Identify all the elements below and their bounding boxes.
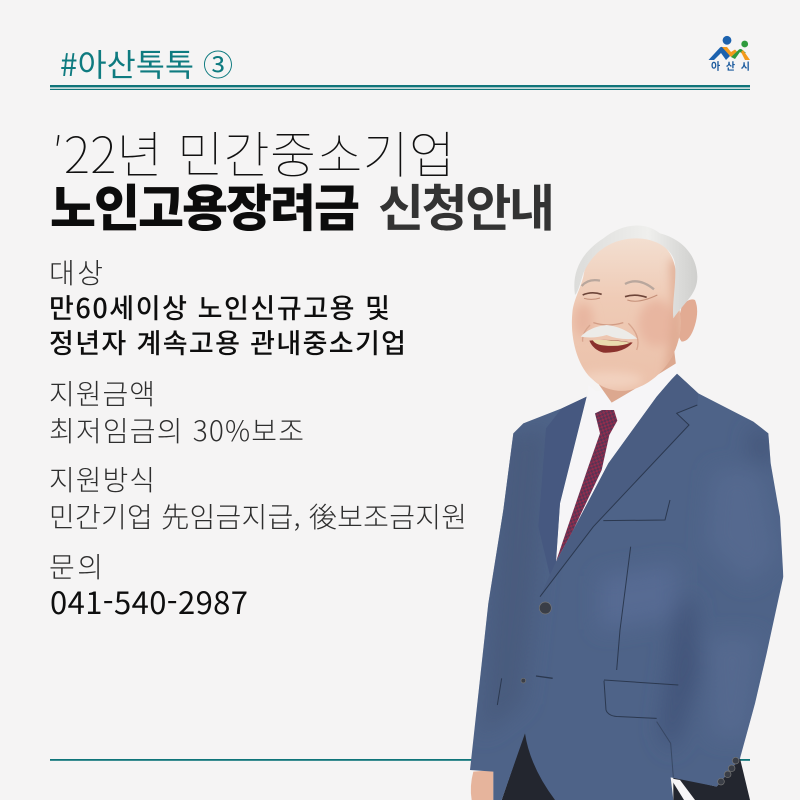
section: target — [49, 252, 406, 361]
section: support method: 민간기업 先임금지급, 後보조금지원 — [49, 496, 467, 536]
section: target: 정년자 계속고용 관내중소기업 — [49, 322, 406, 361]
shirt — [555, 372, 677, 562]
head — [572, 225, 697, 410]
photo: smiling senior man in suit — [460, 225, 800, 800]
section: support amount: 지원금액 — [49, 373, 155, 413]
section: support method — [49, 459, 467, 536]
icon: Asan city logo — [708, 36, 750, 73]
section: contact — [49, 546, 248, 623]
section: support amount: 최저임금의 30%보조 — [49, 410, 304, 450]
hand — [471, 770, 493, 800]
left lapel — [542, 396, 586, 574]
shirt cuff — [671, 778, 695, 800]
section: support amount — [49, 373, 304, 450]
jacket shading — [480, 427, 777, 753]
mouth — [589, 340, 633, 353]
title line 2: 신청안내 — [378, 169, 555, 241]
title line 2: 노인고용장려금 — [50, 169, 360, 241]
title line 1: ′22년 민간중소기업 — [52, 116, 455, 188]
face shading — [573, 260, 683, 388]
face — [572, 237, 681, 391]
right lapel — [556, 374, 698, 562]
hair — [574, 225, 697, 318]
jacket — [460, 370, 800, 800]
icon: Asan city logo: 아 산 시 — [711, 58, 750, 73]
tie — [556, 409, 617, 562]
seams — [497, 405, 697, 777]
eyes and brows — [582, 280, 657, 350]
section: target: 만60세이상 노인신규고용 및 — [49, 287, 390, 326]
shirt collar — [588, 363, 677, 410]
header tag: ③ — [203, 41, 233, 85]
section: target: 대상 — [49, 252, 103, 292]
ear — [677, 299, 697, 342]
teeth — [593, 340, 631, 346]
section: support method: 지원방식 — [49, 459, 155, 499]
buttons — [521, 602, 739, 785]
footer rule — [50, 759, 750, 761]
section: contact: 041-540-2987 — [50, 578, 248, 623]
suit and body — [460, 370, 800, 800]
header tag: #아산톡톡 — [60, 40, 194, 86]
title line 2 — [50, 169, 555, 241]
mustache — [581, 325, 637, 339]
neck — [593, 343, 676, 403]
section: contact: 문의 — [49, 546, 103, 586]
trousers — [502, 732, 750, 800]
nose shadow — [593, 323, 623, 325]
header double rule — [50, 85, 750, 90]
